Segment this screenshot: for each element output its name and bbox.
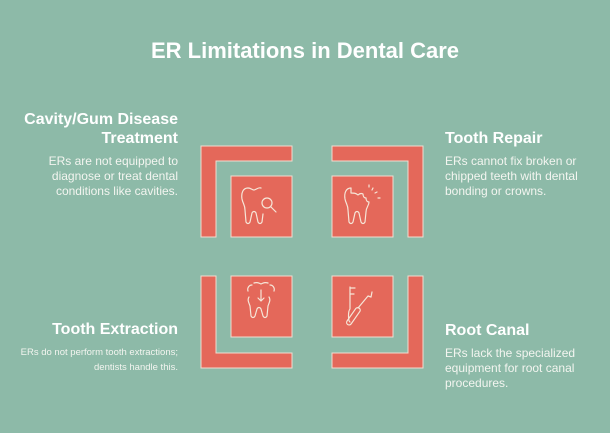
L top-right — [332, 146, 423, 237]
text: tooth extraction: ERs do not perform tooth extractions; dentists handle this. — [21, 347, 178, 373]
square 4 — [332, 276, 393, 337]
text: cavity/gum disease: Treatment — [102, 130, 178, 147]
square 1 — [231, 176, 292, 237]
square 2 — [332, 176, 393, 237]
text: root canal: Root Canal — [445, 322, 529, 339]
icon: tooth magnifier — [242, 188, 276, 224]
icon: tooth extraction — [248, 283, 274, 318]
text: cavity/gum disease — [24, 111, 178, 198]
icon: chipped tooth — [345, 185, 380, 224]
text: cavity/gum disease: ERs are not equipped to diagnose or treat dental conditions like cavities. — [49, 154, 178, 198]
text: tooth repair — [445, 130, 578, 198]
L bottom-left — [201, 276, 292, 368]
text: tooth extraction — [21, 321, 178, 373]
text: root canal — [445, 322, 575, 390]
title: ER Limitations in Dental Care — [151, 38, 459, 63]
text: cavity/gum disease: Cavity/Gum Disease — [24, 111, 178, 128]
L bottom-right — [332, 276, 423, 368]
text: tooth extraction: Tooth Extraction — [52, 321, 178, 338]
text: tooth repair: Tooth Repair — [445, 130, 542, 147]
L top-left — [201, 146, 292, 237]
square 3 — [231, 276, 292, 337]
icon: root canal tool — [346, 287, 372, 326]
text: root canal: ERs lack the specialized equipment for root canal procedures. — [445, 346, 575, 390]
text: tooth repair: ERs cannot fix broken or chipped teeth with dental bonding or crowns. — [445, 154, 578, 198]
